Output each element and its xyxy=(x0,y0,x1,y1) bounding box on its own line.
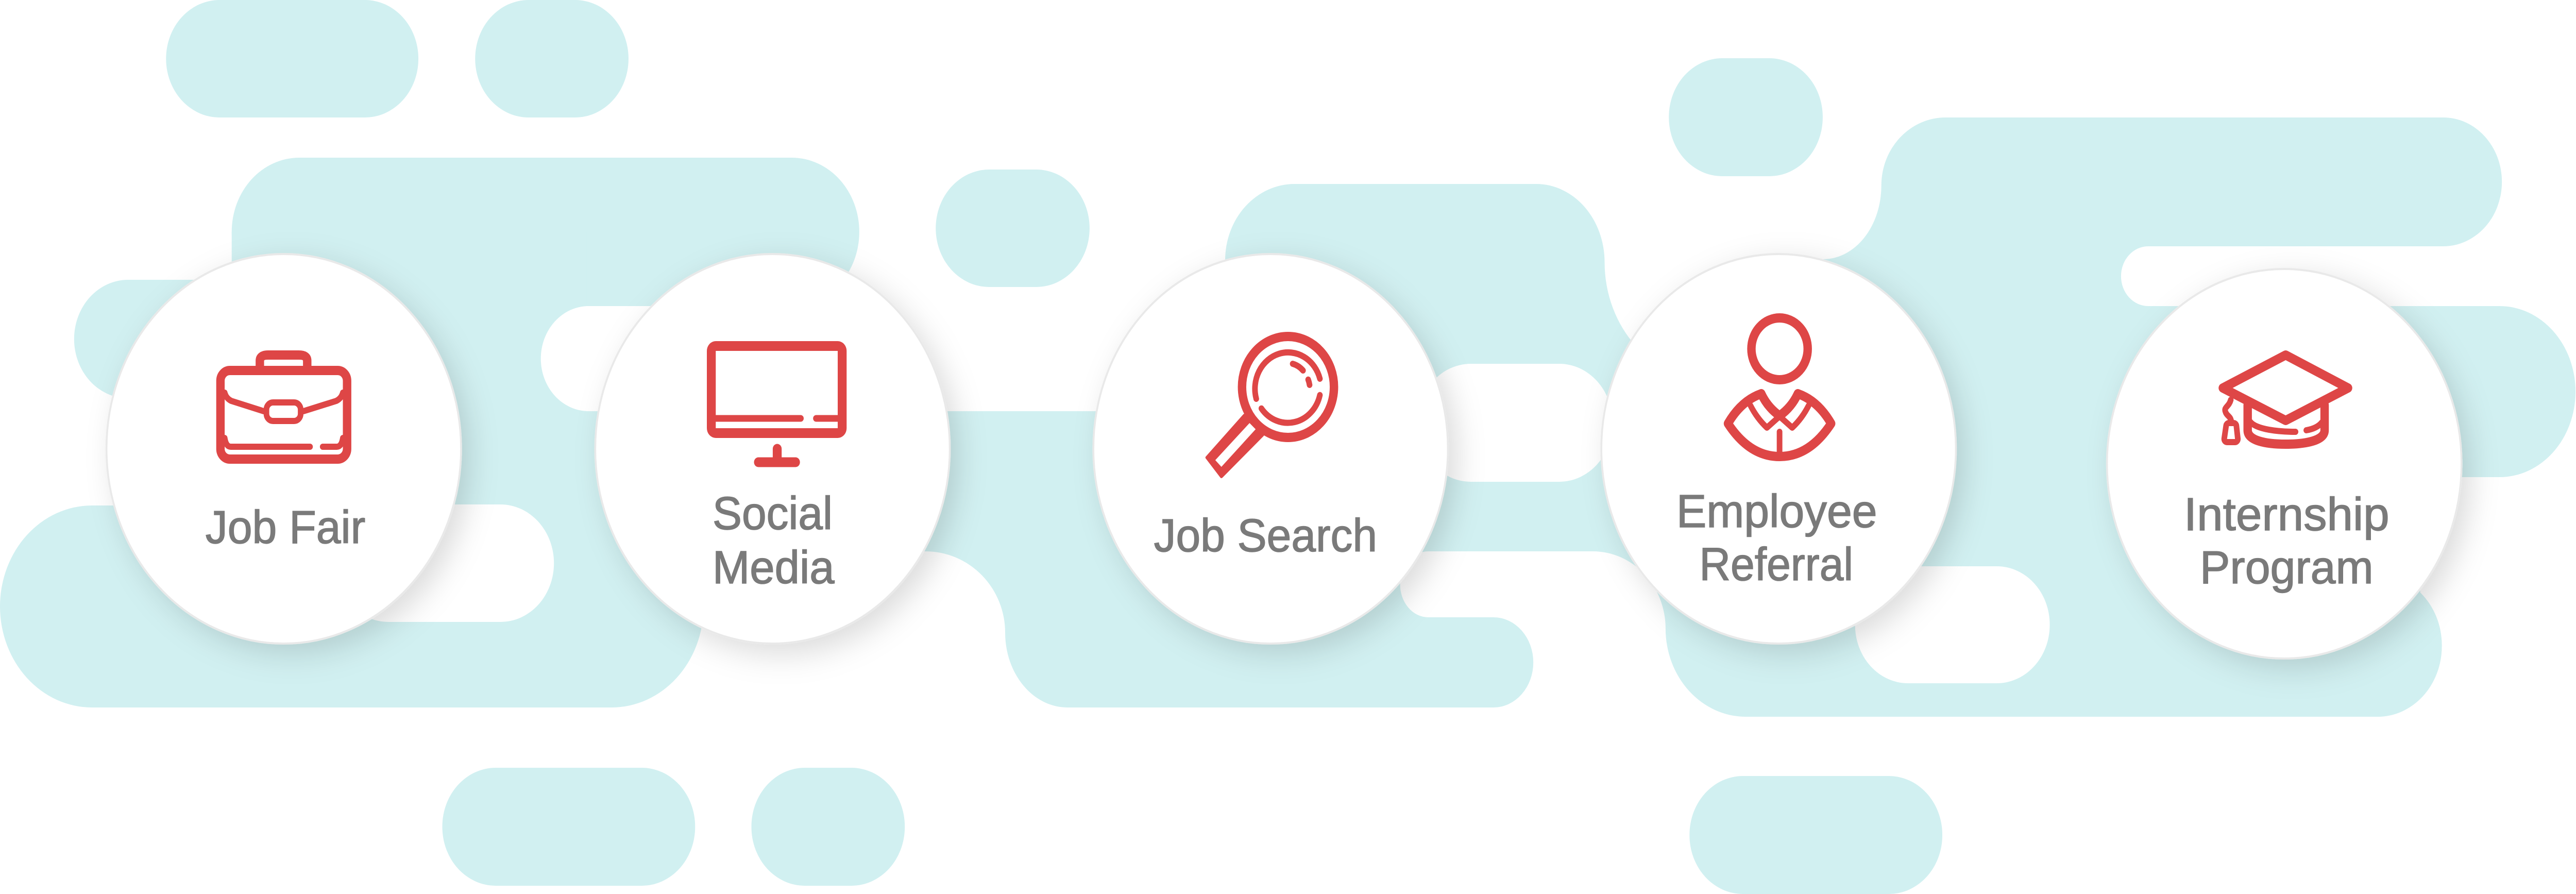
label: Employee: Employee xyxy=(1676,485,1877,537)
panel: Job Search xyxy=(1093,254,1448,644)
icon: person with collar xyxy=(1728,318,1831,457)
panel: Job Fair xyxy=(107,254,461,644)
panel: Employee Referral xyxy=(1601,254,1956,644)
icon: magnifying glass xyxy=(1207,336,1334,477)
icon: briefcase xyxy=(221,355,347,459)
icon: monitor xyxy=(707,341,846,462)
label: Internship: Internship xyxy=(2184,488,2389,541)
icon: graduation cap xyxy=(2223,355,2348,444)
label: Social: Social xyxy=(713,487,833,539)
label: Job Search: Job Search xyxy=(1154,510,1377,562)
panel: Internship Program xyxy=(2107,269,2462,659)
label: Job Fair: Job Fair xyxy=(206,501,365,553)
panel: Social Media xyxy=(595,254,950,644)
label: Referral: Referral xyxy=(1699,538,1853,591)
label: Program: Program xyxy=(2200,542,2374,594)
label: Media: Media xyxy=(713,542,835,594)
